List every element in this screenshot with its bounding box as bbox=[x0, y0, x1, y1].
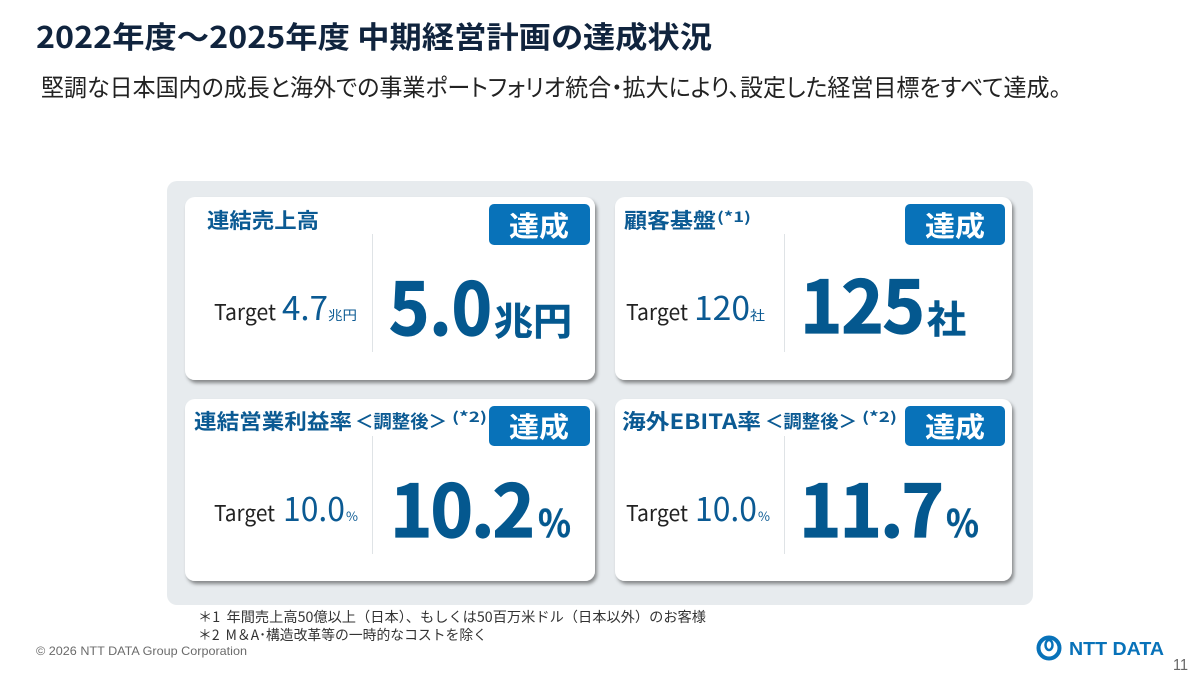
heading: consolidated operating margin: (*2) bbox=[452, 407, 487, 427]
target value: Target bbox=[626, 295, 688, 327]
target value: 120 bbox=[694, 282, 750, 330]
heading: consolidated net sales: 連結売上高 bbox=[207, 205, 319, 235]
heading: overseas EBITA margin: 海外EBITA率 bbox=[622, 406, 761, 436]
heading: consolidated operating margin bbox=[194, 406, 487, 436]
target value: 10.0 bbox=[283, 483, 345, 531]
heading: overseas EBITA margin: ＜調整後＞ bbox=[765, 408, 857, 434]
heading: overseas EBITA margin bbox=[622, 406, 897, 436]
card: customer base bbox=[615, 197, 1012, 380]
target value: 兆円 bbox=[328, 305, 357, 324]
card: consolidated operating margin bbox=[185, 399, 595, 581]
badge: achieved: 達成 bbox=[509, 205, 569, 245]
card: overseas EBITA margin bbox=[615, 399, 1012, 581]
card: consolidated net sales bbox=[185, 197, 595, 380]
heading: customer base: (*1) bbox=[717, 207, 751, 227]
target value: 社 bbox=[750, 305, 765, 324]
badge: achieved: 達成 bbox=[925, 205, 985, 245]
copyright: © 2026 NTT DATA Group Corporation bbox=[36, 644, 247, 658]
panel: results background bbox=[167, 181, 1033, 605]
actual value: 兆円 bbox=[494, 291, 572, 346]
badge: achieved: 達成 bbox=[925, 406, 985, 446]
heading: customer base bbox=[624, 205, 751, 235]
actual value: 125 bbox=[800, 249, 925, 354]
badge: achieved: 達成 bbox=[509, 406, 569, 446]
target value: % bbox=[346, 506, 358, 525]
target value bbox=[214, 282, 357, 330]
actual value: 社 bbox=[927, 289, 966, 344]
target value: Target bbox=[214, 295, 276, 327]
actual value bbox=[389, 251, 572, 356]
heading: overseas EBITA margin: (*2) bbox=[862, 407, 897, 427]
logo: NTT DATA: NTT DATA bbox=[1069, 639, 1164, 659]
heading: consolidated operating margin: 連結営業利益率 bbox=[194, 406, 352, 436]
target value bbox=[626, 483, 770, 531]
title: 2022年度～2025年度 中期経営計画の達成状況 bbox=[36, 13, 712, 57]
badge: achieved bbox=[905, 406, 1005, 446]
target value: Target bbox=[214, 496, 275, 528]
actual value: % bbox=[538, 493, 571, 548]
footnote 1: ＊1 年間売上高50億以上（日本）、もしくは50百万米ドル（日本以外）のお客様 bbox=[198, 607, 706, 627]
badge: achieved bbox=[489, 406, 590, 446]
badge: achieved bbox=[905, 204, 1005, 245]
target value bbox=[214, 483, 358, 531]
target value bbox=[626, 282, 765, 330]
subtitle: 堅調な日本国内の成長と海外での事業ポートフォリオ統合・拡大により、設定した経営目標をすべて達成。 bbox=[41, 68, 1061, 103]
target value: Target bbox=[626, 496, 688, 528]
heading: consolidated operating margin: ＜調整後＞ bbox=[355, 408, 447, 434]
actual value: 11.7 bbox=[799, 453, 944, 558]
page number: 11 bbox=[1173, 657, 1188, 674]
actual value: 10.2 bbox=[390, 453, 535, 558]
footnote 2: ＊2 M＆A･構造改革等の一時的なコストを除く bbox=[198, 625, 487, 645]
target value: 10.0 bbox=[695, 483, 757, 531]
target value: 4.7 bbox=[282, 282, 328, 330]
heading: customer base: 顧客基盤 bbox=[624, 205, 716, 235]
logo: NTT DATA bbox=[1038, 638, 1164, 659]
actual value: % bbox=[946, 493, 979, 548]
target value: % bbox=[758, 506, 770, 525]
actual value: 5.0 bbox=[389, 251, 492, 356]
badge: achieved bbox=[489, 204, 590, 245]
